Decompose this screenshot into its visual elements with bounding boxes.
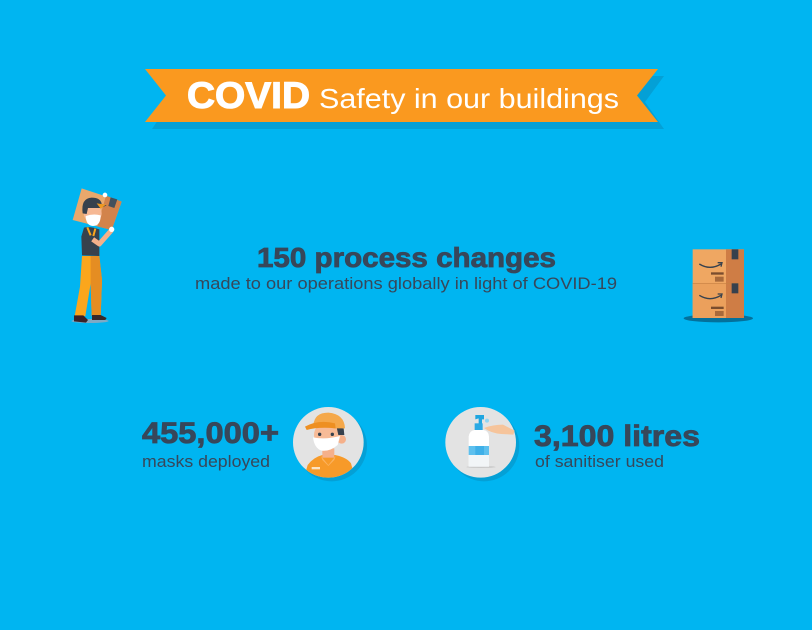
stat number: 3,100 litres: [534, 420, 700, 453]
stat number: 455,000+: [142, 417, 279, 450]
title banner: [145, 69, 664, 129]
illustration: worker carrying box: [71, 188, 122, 323]
subheading: operations: made to our operations globally in light of COVID-19: [195, 274, 617, 293]
title text: COVID: [187, 75, 310, 116]
title text: Safety in our buildings: [319, 83, 619, 114]
illustration: stacked boxes: [684, 249, 753, 322]
stat: masks deployed: [142, 417, 279, 471]
icon: masked worker: [293, 407, 367, 481]
stat label: of sanitiser used: [535, 452, 664, 471]
heading: 150 process changes: 150 process changes: [257, 242, 556, 273]
stat label: masks deployed: [142, 452, 270, 471]
stat: sanitiser used: [534, 420, 700, 471]
icon: sanitiser bottle: [445, 407, 519, 481]
